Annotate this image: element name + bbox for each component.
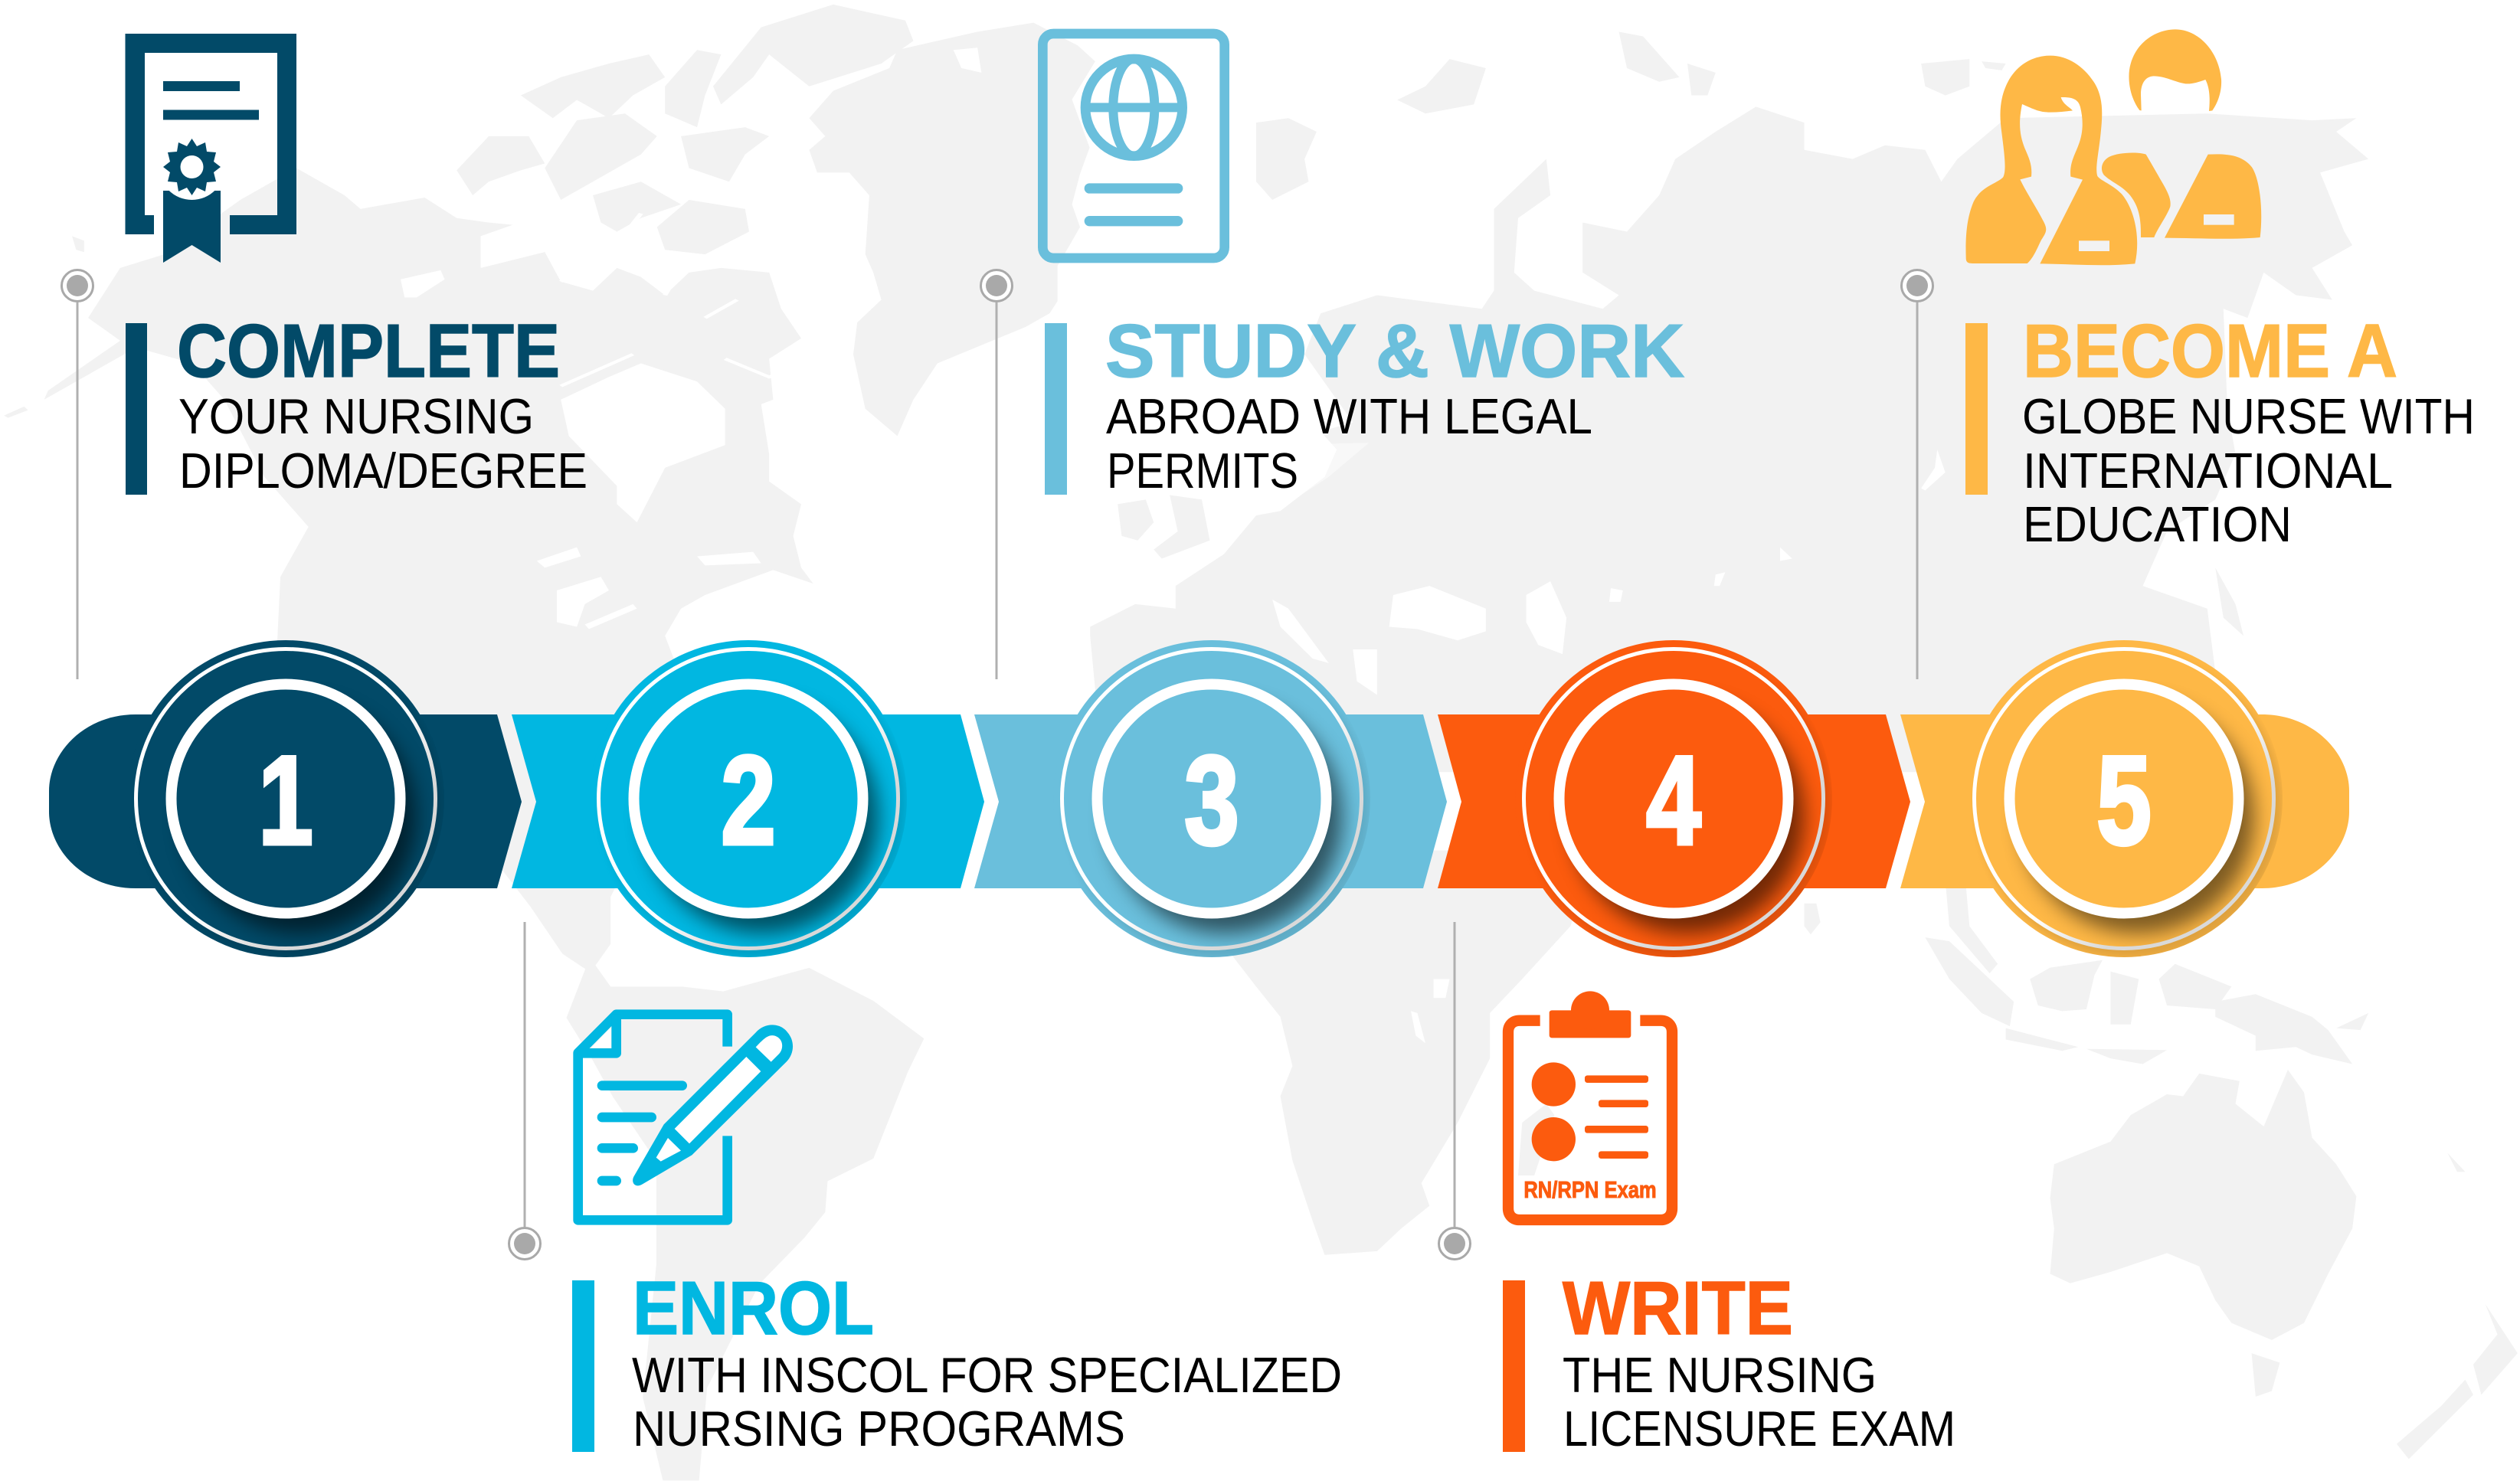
text block: step 4 write [1503, 1266, 1955, 1456]
text block: step 1 complete [126, 309, 587, 499]
seas and lakes cut out of the map [401, 47, 1946, 1043]
text block: step 1 complete: YOUR NURSING [178, 388, 534, 444]
text block: step 3 study and work: ABROAD WITH LEGAL [1106, 388, 1592, 444]
number badge 2: 2 [721, 731, 776, 871]
icon: clipboard exam: RN/RPN Exam [1523, 1177, 1657, 1203]
text block: step 2 enrol: ENROL [633, 1266, 874, 1350]
number badge 5: 5 [2096, 731, 2152, 871]
text block: step 4 write: WRITE [1563, 1266, 1793, 1350]
leader line: step 4 [1438, 922, 1471, 1259]
leader line: step 2 [509, 922, 541, 1259]
text block: step 1 complete: COMPLETE [177, 309, 560, 393]
icon: clipboard exam [1508, 991, 1672, 1220]
text block: step 2 enrol [572, 1266, 1342, 1456]
text block: step 5 become a globe nurse: BECOME A [2023, 309, 2397, 393]
ribbon segment 5 [1900, 714, 2349, 888]
text block: step 2 enrol: NURSING PROGRAMS [633, 1401, 1125, 1456]
number badge 4: 4 [1646, 731, 1701, 871]
text block: step 1 complete: DIPLOMA/DEGREE [179, 443, 587, 499]
icon: passport with globe [1042, 34, 1225, 258]
number badge 1: 1 [258, 731, 313, 871]
number badge 1 [127, 640, 444, 958]
ribbon segment 1 [49, 714, 522, 888]
icon: document and pencil [578, 1015, 793, 1220]
ribbon segment 3 [974, 714, 1447, 888]
number badge 5 [1965, 640, 2283, 958]
number badge 3 [1053, 640, 1370, 958]
icon: nurses [1965, 29, 2261, 265]
number badge 2 [590, 640, 907, 958]
text block: step 3 study and work: PERMITS [1107, 443, 1298, 499]
text block: step 4 write: LICENSURE EXAM [1563, 1401, 1955, 1456]
text block: step 4 write: THE NURSING [1563, 1347, 1877, 1403]
text block: step 2 enrol: WITH INSCOL FOR SPECIALIZED [632, 1347, 1342, 1403]
text block: step 5 become a globe nurse: INTERNATIONAL [2023, 443, 2393, 499]
leader line: step 3 [980, 270, 1013, 679]
number badge 3: 3 [1184, 731, 1239, 871]
text block: step 5 become a globe nurse: GLOBE NURSE WITH [2022, 388, 2475, 444]
icon: certificate [126, 34, 296, 263]
leader line: step 1 [61, 270, 93, 679]
leader line: step 5 [1901, 270, 1933, 679]
text block: step 3 study and work: STUDY & WORK [1105, 309, 1684, 393]
ribbon segment 2 [512, 714, 984, 888]
text block: step 5 become a globe nurse [1965, 309, 2475, 552]
number badge 4 [1515, 640, 1832, 958]
text block: step 5 become a globe nurse: EDUCATION [2023, 496, 2292, 552]
ribbon segment 4 [1438, 714, 1910, 888]
text block: step 3 study and work [1045, 309, 1684, 499]
